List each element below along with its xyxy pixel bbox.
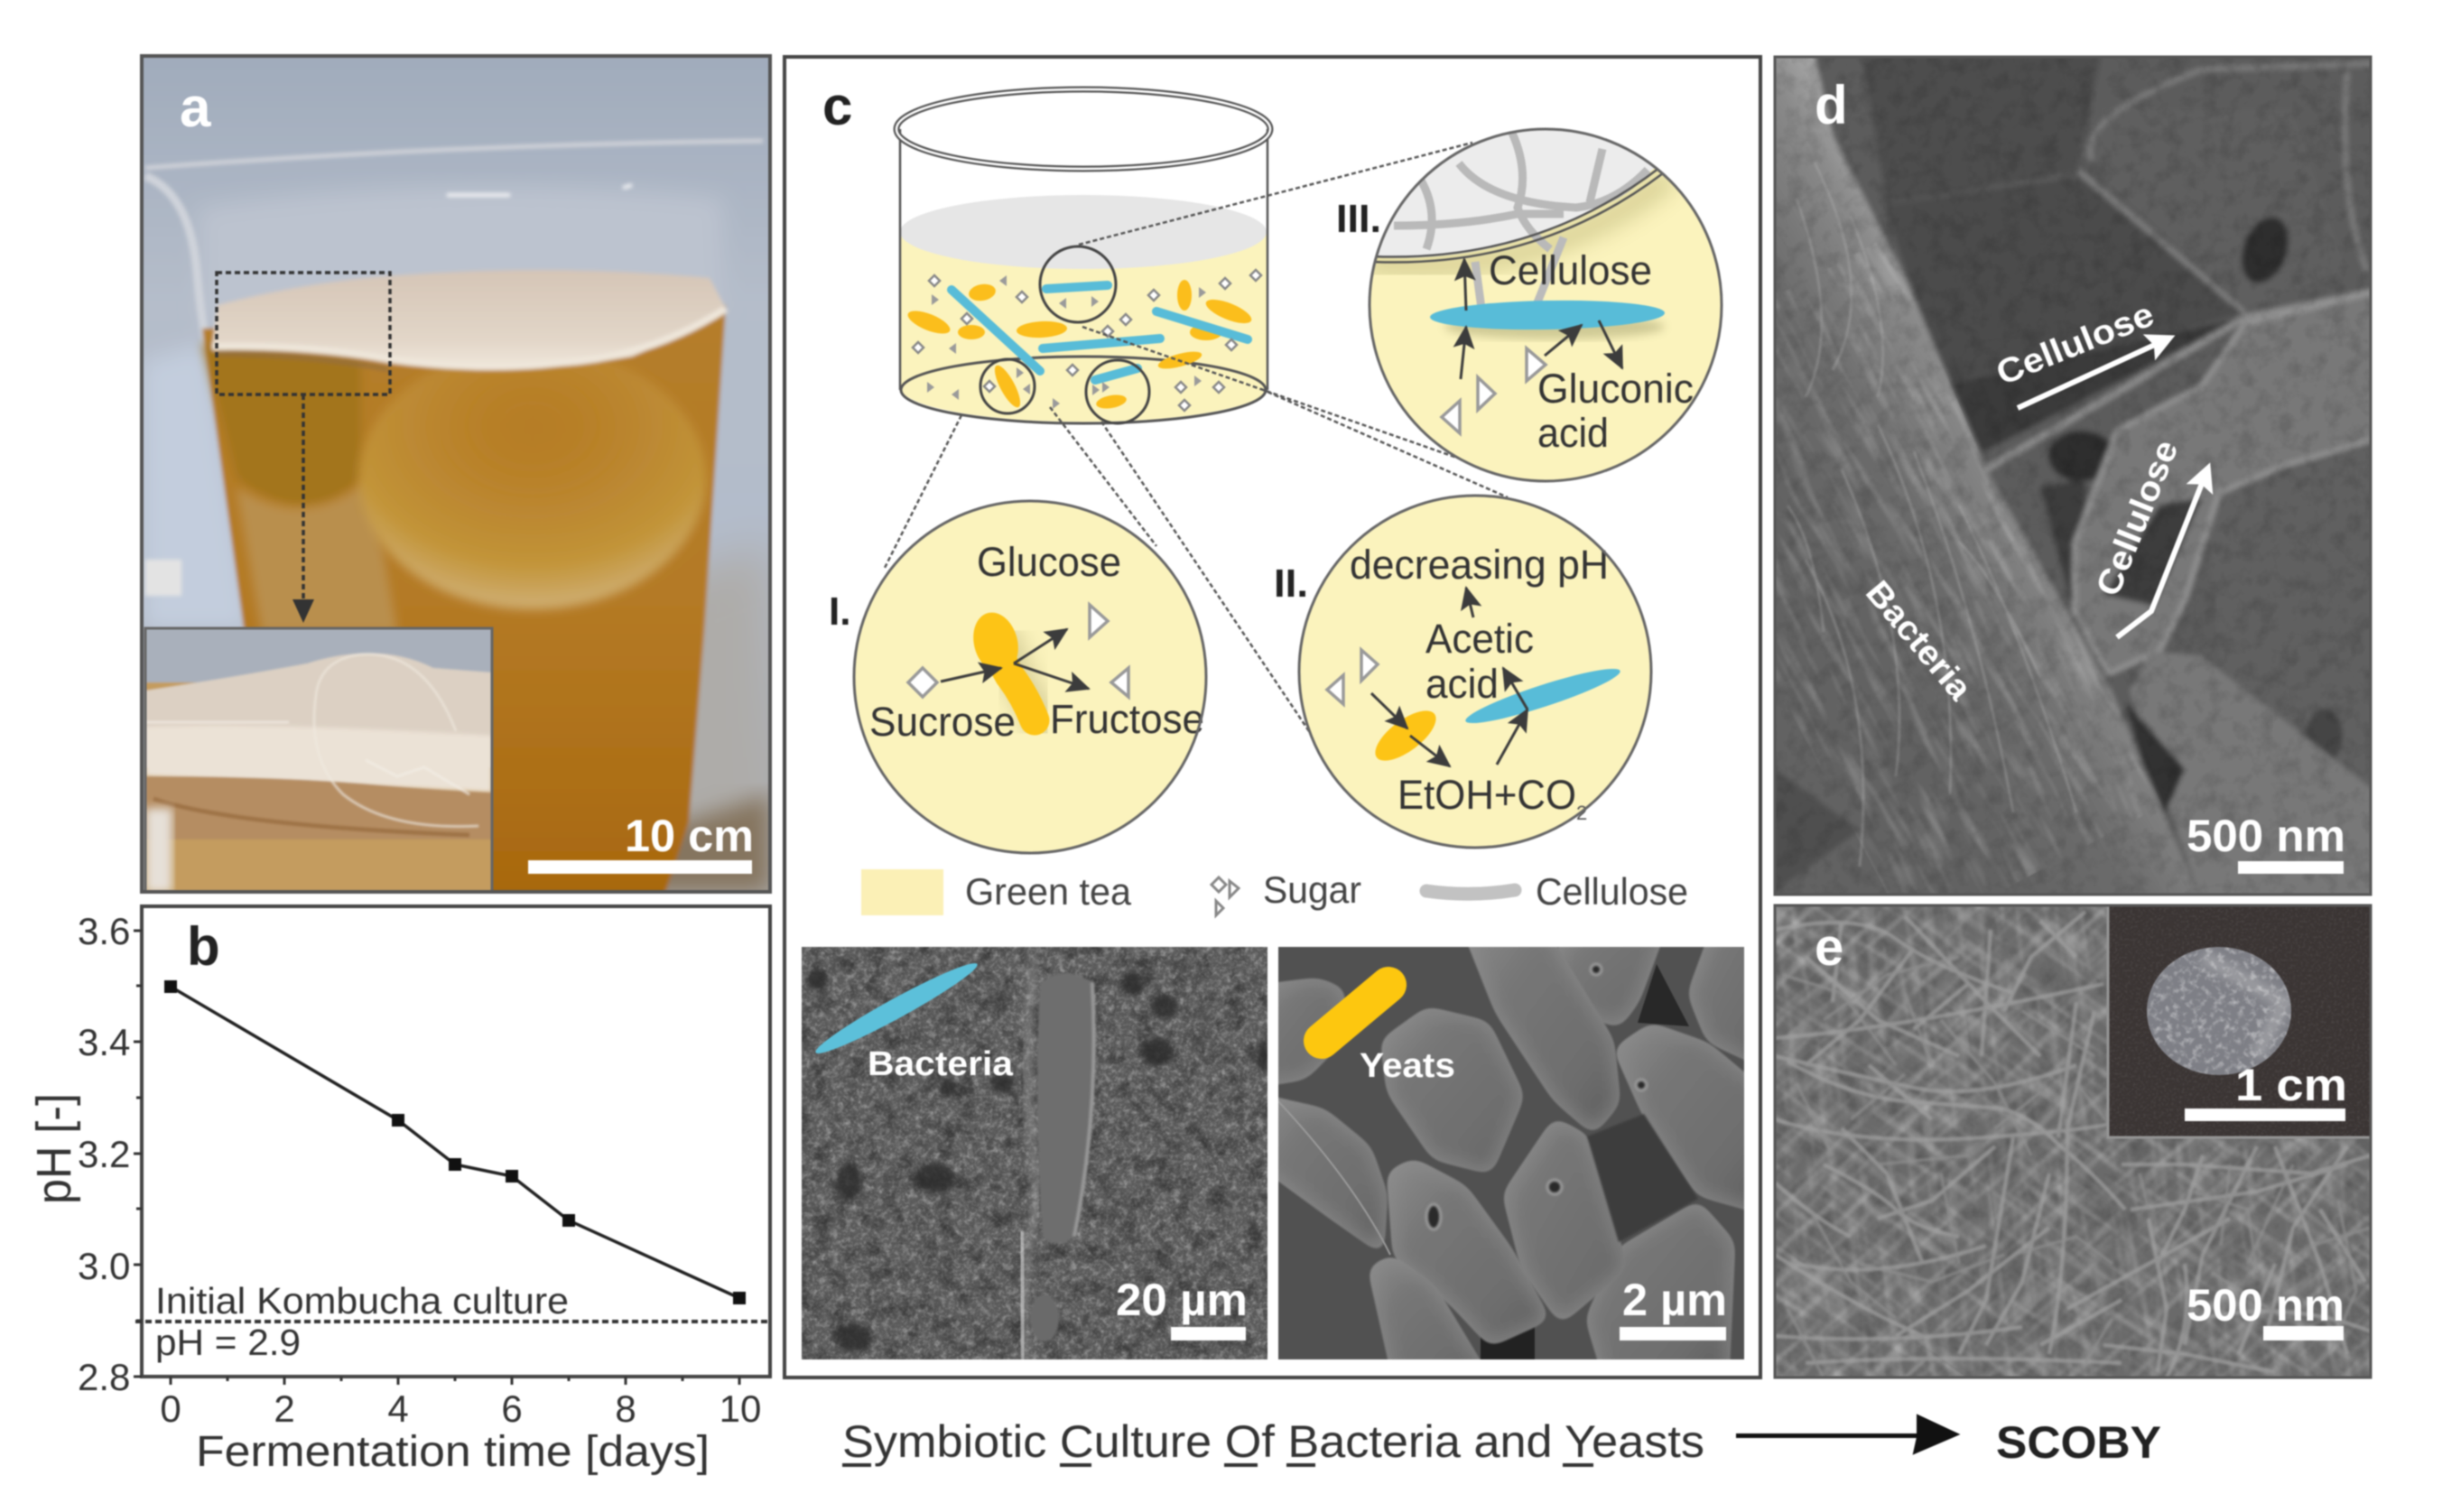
scale label 500 nm: 500 nm [2187,811,2345,861]
panel label e: e [1815,918,1843,977]
x axis labels: 8 [615,1387,636,1430]
arrow to SCOBY [1737,1415,1958,1453]
scale bar [1620,1327,1726,1340]
arrow II a [1371,693,1407,728]
circle I: sucrose hydrolysis [854,501,1206,853]
label I: I. [829,589,850,634]
x axis labels: 10 [720,1387,761,1430]
label Acetic: Acetic [1425,616,1534,662]
scale label 500 nm: 500 nm [2187,1280,2345,1331]
yeast II [1368,701,1444,770]
bacteria marker [811,955,982,1062]
x axis labels: 4 [387,1387,409,1430]
dashed zoom box [217,273,390,394]
sugars III [1442,348,1546,433]
zoom circles [980,246,1149,423]
scale bar a [528,860,752,874]
fibres [1775,912,2371,1377]
label cellulose: Cellulose [1536,870,1688,913]
label sugar: Sugar [1263,868,1361,911]
panel d: SEM of bacterium and cellulose [1773,54,2372,897]
cellulose ribbon [2075,290,2383,673]
second bacterium [2130,651,2383,903]
SEM rod [1030,973,1095,1341]
panel label a: a [180,77,211,139]
panel e: SEM of cellulose fibres [1775,905,2371,1377]
inset photo [145,628,492,893]
data line [171,987,739,1298]
arrow III a [1461,327,1466,379]
panel label d: d [1815,75,1848,135]
x axis title: Fermentation time [days] [196,1428,710,1476]
sugars [913,270,1261,411]
inset SCOBY disc [2145,946,2293,1076]
label acid: acid [1537,410,1609,456]
label cellulose 1: Cellulose [1992,295,2159,393]
bacterium body [1760,45,2202,903]
yeast I [994,632,1035,720]
y axis labels: 3.4 [78,1021,130,1063]
arrow III c [1545,325,1582,356]
arrow III d [1599,320,1622,368]
bacterium II [1462,661,1623,731]
liquid [202,305,726,898]
scale label 10 cm: 10 cm [625,811,754,861]
icon sugar [1212,877,1239,915]
panel c: fermentation schematic [785,57,1765,1381]
label Fructose: Fructose [1050,696,1204,742]
label SCOBY: SCOBY [1996,1417,2161,1468]
inset scale bar [2185,1108,2345,1121]
arrow II e [1466,588,1473,617]
y axis labels: 3.2 [78,1133,130,1175]
scale bar [1171,1327,1246,1340]
label Sucrose: Sucrose [869,699,1016,745]
y axis labels: 3.6 [78,910,130,952]
y axis labels [78,910,130,1398]
data markers [164,980,746,1304]
arrow II d [1503,668,1527,710]
sugars II [1327,650,1378,704]
glass rim [145,141,763,168]
arrow I c [1014,663,1089,689]
label cellulose 2: Cellulose [2089,435,2187,601]
arrow II c [1497,710,1527,765]
cellulose fibres [1969,290,2383,479]
label Glucose: Glucose [977,539,1121,585]
scale label 1 cm: 1 cm [2235,1060,2347,1110]
arrow II b [1410,736,1450,766]
panel b: pH line chart [27,906,770,1476]
label green tea: Green tea [965,870,1132,913]
label III: III. [1336,197,1381,241]
y axis labels: 2.8 [78,1356,130,1398]
x axis labels: 0 [160,1387,181,1430]
arrow: cellulose 2 [2117,468,2208,637]
foam layer [212,270,726,370]
label acid: acid [1425,661,1499,707]
swatch cellulose [1426,890,1515,894]
swatch green tea [861,869,943,915]
panel label c: c [822,76,852,136]
SEM image: yeasts [1277,946,1745,1360]
y axis labels: 3.0 [78,1245,130,1287]
beaker with culture [896,89,1270,423]
SEM image: bacteria [802,947,1271,1359]
circle III: cellulose production [1367,126,1724,484]
scale label 20 µm: 20 µm [1116,1275,1248,1325]
panel label b: b [187,916,220,977]
caption: acronym expansion: Symbiotic Culture Of Bacteria and Yeasts [842,1416,1704,1467]
label EtOH+CO2: EtOH+CO [1397,772,1576,818]
panel a: beaker photo [135,50,776,898]
x axis labels [160,1387,761,1430]
x axis labels: 2 [274,1387,295,1430]
label Bacteria: Bacteria [868,1045,1014,1083]
y axis title: pH [-] [27,1093,81,1204]
arrow III b [1464,259,1466,311]
bacterium [1430,299,1665,331]
holes [2040,210,2343,763]
scale label 2 µm: 2 µm [1622,1275,1727,1325]
subscript 2: 2 [1576,802,1587,824]
yeast marker [1322,985,1388,1041]
dashed arrow [302,394,305,619]
arrow: cellulose 1 [2018,338,2170,408]
circle II: acetic acid formation [1299,496,1651,848]
dashed zoom connectors [884,143,1508,742]
label bacteria: Bacteria [1858,574,1979,709]
annotation: Initial Kombucha culture [155,1280,569,1322]
arrow I b [1014,629,1067,663]
bacteria rods [952,285,1248,380]
label Gluconic: Gluconic [1537,366,1694,412]
sugars I [908,668,937,697]
arrow I a [941,668,1001,682]
scale bar [2263,1326,2344,1340]
yeast rods [905,280,1254,411]
label decreasing pH: decreasing pH [1350,542,1609,588]
label II: II. [1274,561,1308,606]
label Cellulose: Cellulose [1489,247,1652,293]
x axis labels: 6 [501,1387,523,1430]
scale bar [2238,861,2344,874]
reference line pH 2.9 [135,1320,770,1323]
submerged SCOBY disc [359,348,706,609]
label Yeats: Yeats [1360,1047,1455,1085]
annotation value: pH = 2.9 [155,1322,301,1363]
inset photo background [2108,905,2371,1137]
legend [861,868,1688,915]
